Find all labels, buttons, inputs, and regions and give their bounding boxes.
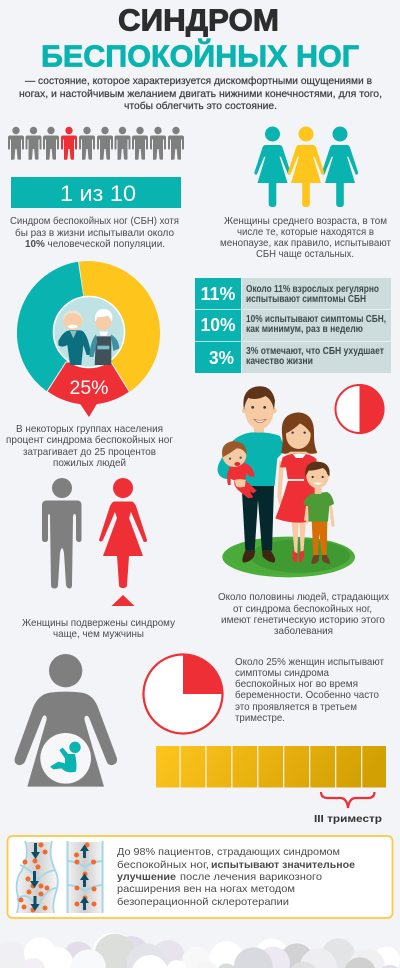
- brace: third trimester: [321, 792, 374, 808]
- text: genetics: [218, 591, 390, 637]
- row: 10 percent: как минимум, раз в неделю: [246, 324, 363, 335]
- icon: healthy vein: [67, 841, 103, 913]
- icon: damaged vein: [17, 841, 58, 913]
- text: treatment result: [117, 846, 355, 908]
- text: middle-aged women: [220, 215, 391, 260]
- text: treatment result: До 98% пациентов, страдающих синдромом: [117, 846, 340, 858]
- text: genetics: от синдрома беспокойных ног,: [233, 603, 372, 615]
- text: population share: [10, 215, 179, 250]
- text: elderly groups: процент синдрома беспокойных ног: [6, 434, 173, 446]
- row: 11 percent: испытывают симптомы СБН: [246, 294, 366, 305]
- text: middle-aged women: менопаузе, как правило, испытывают: [220, 237, 391, 249]
- text: treatment result: безоперационной склеротерапии: [117, 896, 289, 908]
- text: population share: 10% человеческой популяции.: [25, 238, 165, 250]
- text: elderly groups: затрагивает до 25 процентов: [23, 446, 156, 458]
- intro text: [19, 75, 382, 112]
- decoration: clouds: [0, 933, 400, 968]
- text: elderly groups: [6, 423, 173, 469]
- icon: three women: [254, 126, 358, 207]
- text: population share: Синдром беспокойных ног (СБН) хотя: [10, 215, 179, 227]
- row: 10 percent: [200, 314, 386, 335]
- text: treatment result: испытывают значительное: [211, 859, 355, 871]
- text: pregnancy: Около 25% женщин испытывают: [235, 656, 384, 668]
- grass: [222, 537, 355, 577]
- row: 11 percent: [200, 284, 379, 305]
- text: pregnancy: симптомы синдрома: [235, 667, 329, 679]
- marker triangle: [112, 595, 134, 606]
- fetus in white circle: [40, 733, 91, 784]
- text: elderly groups: В некоторых группах населения: [16, 423, 163, 435]
- intro text: ногах, и настойчивым желанием двигать нижними конечностями, для того,: [19, 88, 382, 100]
- red 25 percent callout: 25%: [70, 378, 109, 399]
- son: [303, 462, 335, 564]
- text: genetics: имеют генетическую историю этого: [221, 614, 385, 626]
- baby: [222, 441, 257, 498]
- text: population share: бы раз в жизни испытывали около: [15, 227, 174, 239]
- row: 3 percent: качество жизни: [246, 356, 313, 367]
- red 25 percent callout: [47, 362, 130, 418]
- text: pregnancy: триместре.: [235, 712, 285, 724]
- father: [218, 386, 285, 563]
- text: middle-aged women: Женщины среднего возраста, в том: [224, 215, 387, 227]
- text: treatment result: после лечения варикозного: [180, 871, 322, 883]
- title: БЕСПОКОЙНЫХ НОГ: [41, 38, 359, 74]
- illustration: family: [218, 386, 355, 577]
- text: genetics: Около половины людей, страдающих: [218, 591, 390, 603]
- row: 3 percent: 3%: [209, 348, 234, 368]
- donut chart: [17, 261, 160, 418]
- text: treatment result: улучшение: [117, 871, 176, 883]
- text: middle-aged women: СБН чаще остальных.: [256, 248, 354, 260]
- intro text: — состояние, которое характеризуется дискомфортными ощущениями в: [25, 75, 372, 87]
- row: 3 percent: [209, 346, 384, 368]
- text: women more often: Женщины подвержены синдрому: [22, 617, 176, 629]
- intro text: чтобы облегчить это состояние.: [124, 100, 277, 112]
- row: 3 percent: 3% отмечают, что СБН ухудшает: [246, 346, 384, 357]
- pie: quarter: [144, 654, 223, 734]
- statistics table: [195, 278, 391, 373]
- text: pregnancy: это проявляется в третьем: [235, 701, 357, 713]
- icon: woman: [99, 478, 147, 588]
- panel: sclerotherapy: [8, 836, 392, 918]
- text: pregnancy: беременности. Особенно часто: [235, 689, 379, 701]
- banner: 1 in 10: 1 из 10: [60, 181, 136, 206]
- row: 11 percent: Около 11% взрослых регулярно: [246, 284, 379, 295]
- pie: half: [336, 384, 384, 434]
- mother: [275, 412, 317, 562]
- title: [41, 2, 359, 74]
- text: treatment result: беспокойных ног,: [117, 859, 209, 871]
- text: genetics: заболевания: [274, 625, 333, 637]
- text: pregnancy: беспокойных ног во время: [235, 678, 358, 690]
- text: pregnancy: [235, 656, 384, 724]
- month bars: [156, 746, 386, 788]
- icon: elderly couple: [54, 296, 124, 368]
- row: 11 percent: 11%: [200, 284, 236, 304]
- icon: ten people, one in red: [8, 127, 184, 160]
- title: СИНДРОМ: [118, 2, 279, 38]
- text: middle-aged women: числе те, которые находятся в: [237, 226, 374, 238]
- text: treatment result: расширения вен на ногах методом: [117, 883, 295, 895]
- icon: pregnant woman: [15, 654, 117, 787]
- text: women more often: чаще, чем мужчины: [53, 628, 144, 640]
- banner: 1 in 10: [11, 177, 181, 208]
- label: third trimester: III триместр: [314, 813, 382, 825]
- text: elderly groups: пожилых людей: [53, 457, 126, 469]
- icon: man: [42, 478, 82, 588]
- row: 10 percent: 10%: [200, 315, 236, 335]
- text: women more often: [22, 617, 176, 640]
